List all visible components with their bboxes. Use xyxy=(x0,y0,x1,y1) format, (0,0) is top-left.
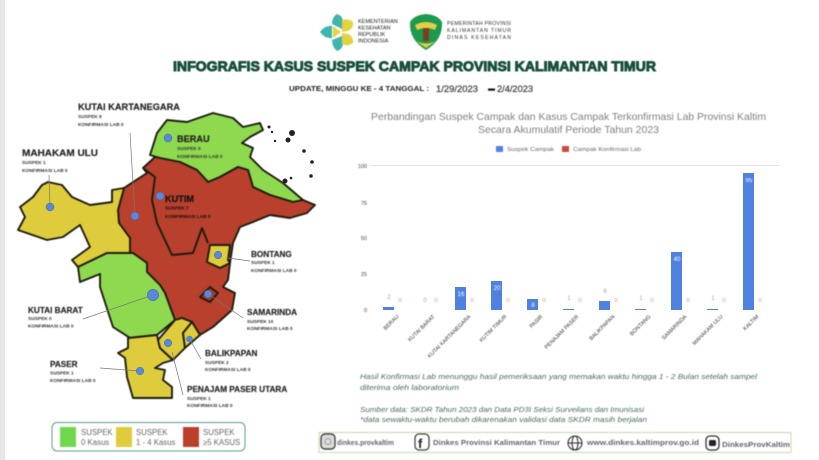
data labels: Suspek Campak: 20 xyxy=(494,286,501,292)
label: Balikpapan: SUSPEK 2 xyxy=(205,360,229,366)
x axis labels: BERAU xyxy=(383,314,400,332)
x axis labels: PASIR xyxy=(529,314,544,330)
footer social bar: Dinkes Provinsi Kalimantan Timur xyxy=(433,440,560,447)
label: Kutai Barat xyxy=(28,306,83,330)
update date line: 1/29/2023 xyxy=(436,84,478,95)
icon: website globe xyxy=(568,436,582,450)
icon: instagram xyxy=(321,434,335,449)
x axis labels: MAHAKAM ULU xyxy=(692,314,724,347)
label: Kutai Barat: SUSPEK 0 xyxy=(28,316,52,322)
data labels: Suspek Campak: 1 xyxy=(567,296,571,302)
icon: facebook xyxy=(415,434,429,451)
x axis labels: KUTAI BARAT xyxy=(407,314,437,343)
notes xyxy=(360,372,757,424)
region: Paser xyxy=(118,335,173,398)
label: Berau xyxy=(177,134,223,160)
map legend: SUSPEK xyxy=(203,428,235,437)
data labels: Campak Konfirmasi Lab: 0 xyxy=(470,298,474,304)
label: Samarinda: SAMARINDA xyxy=(247,308,297,317)
label: Balikpapan: KONFIRMASI LAB 0 xyxy=(205,367,251,373)
data labels: Campak Konfirmasi Lab: 0 xyxy=(614,298,618,304)
notes: Hasil Konfirmasi Lab menunggu hasil pemeriksaan yang memakan waktu hingga 1 - 2 Bulan setelah sampel xyxy=(360,372,757,381)
data labels: Suspek Campak: 1 xyxy=(711,296,715,302)
footer social bar: DinkesProvKaltim xyxy=(722,442,790,449)
x axis labels: BALIKPAPAN xyxy=(589,314,616,342)
data labels: Campak Konfirmasi Lab: 0 xyxy=(758,298,762,304)
label: Paser xyxy=(50,360,96,384)
bar chart xyxy=(358,164,780,360)
label: Samarinda xyxy=(247,308,297,332)
chart title: Perbandingan Suspek Campak dan Kasus Campak Terkonfirmasi Lab Provinsi Kaltim xyxy=(371,111,766,123)
label: Balikpapan: BALIKPAPAN xyxy=(205,349,258,358)
icon: youtube xyxy=(706,436,719,450)
update date line: 2/4/2023 xyxy=(497,84,533,95)
map of Kalimantan Timur xyxy=(18,113,315,398)
label: Berau: KONFIRMASI LAB 0 xyxy=(177,154,223,160)
label: Bontang: SUSPEK 1 xyxy=(251,260,275,266)
x axis labels: PENAJAM PASER xyxy=(544,314,580,351)
data labels: Suspek Campak: 0 xyxy=(423,298,427,304)
title: INFOGRAFIS KASUS SUSPEK CAMPAK PROVINSI KALIMANTAN TIMUR xyxy=(173,58,656,74)
map legend xyxy=(52,422,245,451)
notes: Sumber data: SKDR Tahun 2023 dan Data PD3I Seksi Surveilans dan Imunisasi xyxy=(360,405,644,414)
region: Kutim, Kutai Kartanegara, Samarinda xyxy=(118,157,315,335)
update date line xyxy=(289,84,533,95)
data labels: Campak Konfirmasi Lab: 0 xyxy=(578,298,582,304)
label: Kutim: KONFIRMASI LAB 0 xyxy=(165,214,211,220)
region: Kutai Barat xyxy=(78,253,175,338)
region: Berau xyxy=(150,113,303,202)
label: Paser: KONFIRMASI LAB 0 xyxy=(50,378,96,384)
data labels: Suspek Campak: 6 xyxy=(603,289,607,295)
chart legend: Campak Konfirmasi Lab xyxy=(573,147,641,153)
data labels: Campak Konfirmasi Lab: 0 xyxy=(722,298,726,304)
label: Kutai Kartanegara: KUTAI KARTANEGARA xyxy=(78,102,180,112)
label: Kutim: KUTIM xyxy=(165,194,194,204)
label: Mahakam Ulu xyxy=(22,148,98,174)
bars: Suspek Campak xyxy=(383,173,754,310)
label: Paser: SUSPEK 1 xyxy=(50,370,74,376)
data labels: Campak Konfirmasi Lab: 0 xyxy=(542,298,546,304)
y axis labels: 25 xyxy=(361,272,367,278)
map legend: ≥5 KASUS xyxy=(203,438,240,447)
footer social bar xyxy=(319,432,791,452)
label: Kutai Barat: KUTAI BARAT xyxy=(28,306,83,315)
data labels: Suspek Campak: 40 xyxy=(674,257,681,263)
data labels: Suspek Campak: 8 xyxy=(531,303,535,309)
chart title: Secara Akumulatif Periode Tahun 2023 xyxy=(478,124,659,136)
data labels: Suspek Campak: 1 xyxy=(639,296,643,302)
data labels: Suspek Campak xyxy=(387,178,753,309)
x axis labels: SAMARINDA xyxy=(661,314,689,342)
map legend: SUSPEK xyxy=(136,428,168,437)
label: Penajam Paser Utara: KONFIRMASI LAB 0 xyxy=(187,403,233,409)
label: Kutai Barat: KONFIRMASI LAB 0 xyxy=(28,324,74,330)
y axis labels: 75 xyxy=(361,201,367,207)
data labels: Campak Konfirmasi Lab: 0 xyxy=(434,298,438,304)
label: Bontang: KONFIRMASI LAB 0 xyxy=(251,268,297,274)
label: Paser: PASER xyxy=(50,360,78,369)
label: Samarinda: KONFIRMASI LAB 0 xyxy=(247,326,293,332)
y axis labels: 0 xyxy=(364,308,367,314)
footer social bar: dinkes.provkaltim xyxy=(337,440,394,447)
label: Mahakam Ulu: KONFIRMASI LAB 0 xyxy=(22,168,68,174)
data labels: Suspek Campak: 16 xyxy=(458,292,465,298)
region: Bontang xyxy=(207,245,230,268)
label: Bontang xyxy=(251,250,297,274)
logo: Dinas Kesehatan Kalimantan Timur xyxy=(410,14,511,50)
logo: Dinas Kesehatan Kalimantan Timur: KALIMANTAN TIMUR xyxy=(447,28,511,34)
data labels: Campak Konfirmasi Lab: 0 xyxy=(398,298,402,304)
logo: Kementerian Kesehatan: KEMENTERIAN xyxy=(358,19,398,25)
data labels: Campak Konfirmasi Lab: 0 xyxy=(506,298,510,304)
x axis labels xyxy=(383,314,761,360)
data labels: Suspek Campak: 2 xyxy=(387,295,391,301)
label: Samarinda: SUSPEK 10 xyxy=(247,319,274,325)
notes: *data sewaktu-waktu berubah dikarenakan validasi data SKDR masih berjalan xyxy=(360,415,647,424)
leader lines xyxy=(49,133,250,395)
boundary: Kutim and Kutai Kartanegara xyxy=(143,168,208,255)
logo: Dinas Kesehatan Kalimantan Timur: DINAS KESEHATAN xyxy=(447,35,511,41)
chart legend: Suspek Campak xyxy=(507,147,554,153)
chart title xyxy=(371,111,766,136)
region: Balikpapan xyxy=(183,322,200,348)
x axis labels: BONTANG xyxy=(629,314,652,337)
y axis labels: 50 xyxy=(361,236,367,242)
data labels: Campak Konfirmasi Lab xyxy=(398,298,762,304)
logo: Dinas Kesehatan Kalimantan Timur: PEMERINTAH PROVINSI xyxy=(447,21,511,27)
x axis labels: KUTAI KARTANEGARA xyxy=(427,314,473,360)
logo: Kementerian Kesehatan: REPUBLIK xyxy=(358,32,386,38)
region: Samarinda xyxy=(200,287,218,302)
y axis labels: 100 xyxy=(358,164,367,170)
label: Bontang: BONTANG xyxy=(251,250,292,259)
logo: Kementerian Kesehatan: INDONESIA xyxy=(358,38,389,44)
label: Penajam Paser Utara: SUSPEK 1 xyxy=(187,396,211,402)
chart legend xyxy=(496,146,641,153)
map legend: 1 - 4 Kasus xyxy=(136,438,176,447)
x axis labels: KALTIM xyxy=(742,314,761,332)
label: Kutim xyxy=(165,194,211,220)
map legend: SUSPEK xyxy=(81,428,113,437)
label: Balikpapan xyxy=(205,349,258,373)
label: Penajam Paser Utara: PENAJAM PASER UTARA xyxy=(187,385,287,394)
icon: facebook: f xyxy=(418,436,423,451)
map legend: 0 Kasus xyxy=(81,438,109,447)
x axis labels: KUTIM TIMUR xyxy=(479,314,508,344)
region: Penajam Paser Utara xyxy=(158,318,192,360)
label: Kutai Kartanegara xyxy=(78,102,180,128)
y axis labels xyxy=(358,164,367,314)
map location dots xyxy=(46,134,222,375)
label: Kutai Kartanegara: KONFIRMASI LAB 0 xyxy=(78,122,124,128)
notes: diterima oleh laboratorium xyxy=(360,383,459,392)
label: Kutai Kartanegara: SUSPEK 9 xyxy=(78,114,102,120)
label: Kutim: SUSPEK 7 xyxy=(165,206,189,212)
logo: Kementerian Kesehatan xyxy=(320,14,398,51)
label: Berau: BERAU xyxy=(177,134,210,144)
label: Penajam Paser Utara xyxy=(187,385,287,409)
update date line: UPDATE, MINGGU KE - 4 TANGGAL : xyxy=(289,84,429,93)
label: Berau: SUSPEK 0 xyxy=(177,146,201,152)
data labels: Campak Konfirmasi Lab: 0 xyxy=(650,298,654,304)
islands xyxy=(268,126,314,184)
label: Mahakam Ulu: MAHAKAM ULU xyxy=(22,148,98,158)
data labels: Campak Konfirmasi Lab: 0 xyxy=(686,298,690,304)
footer social bar: www.dinkes.kaltimprov.go.id xyxy=(586,440,699,447)
logo: Kementerian Kesehatan: KESEHATAN xyxy=(358,26,391,32)
data labels: Suspek Campak: 95 xyxy=(746,178,753,184)
region: Mahakam Ulu xyxy=(18,182,130,267)
label: Mahakam Ulu: SUSPEK 1 xyxy=(22,160,46,166)
